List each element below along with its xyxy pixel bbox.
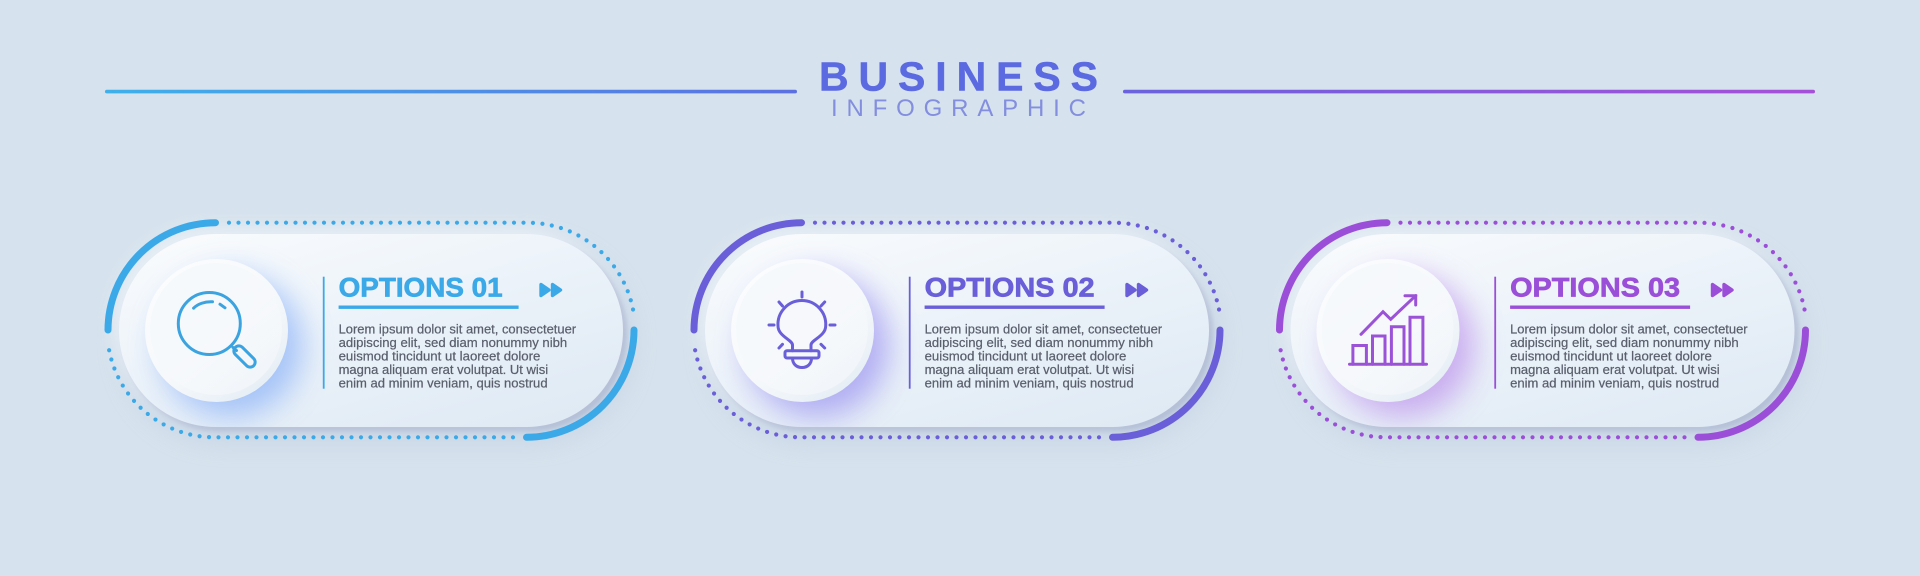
body text bbox=[925, 322, 1162, 390]
solid arc top left bbox=[108, 223, 216, 330]
body text: enim ad minim veniam, quis nostrud bbox=[1510, 376, 1719, 390]
icon: magnifying glass bbox=[178, 292, 257, 369]
pill highlight bbox=[112, 227, 616, 420]
icon circle bbox=[145, 259, 288, 402]
right header line bbox=[1123, 90, 1815, 93]
dotted arc bottom left bbox=[694, 346, 1099, 437]
heading underline bbox=[1510, 306, 1690, 309]
dotted arc top right bbox=[815, 223, 1220, 314]
pill body bbox=[1290, 234, 1794, 427]
panel: options 02 bbox=[694, 223, 1220, 439]
body text: adipiscing elit, sed diam nonummy nibh bbox=[339, 336, 567, 350]
body text: euismod tincidunt ut laoreet dolore bbox=[1510, 350, 1712, 364]
icon: double arrow bbox=[1127, 284, 1146, 296]
pill edge shadow bbox=[708, 238, 1213, 431]
header bbox=[105, 54, 1815, 122]
body text bbox=[1510, 322, 1748, 390]
circle coloured glow bbox=[1330, 273, 1474, 417]
icon circle bbox=[1316, 259, 1460, 402]
pill highlight bbox=[1284, 227, 1788, 420]
pill soft shadow bbox=[1296, 246, 1800, 439]
body text: enim ad minim veniam, quis nostrud bbox=[925, 376, 1134, 390]
pill soft shadow bbox=[125, 246, 629, 439]
body text: euismod tincidunt ut laoreet dolore bbox=[925, 350, 1126, 364]
divider bbox=[1494, 277, 1496, 389]
body text: adipiscing elit, sed diam nonummy nibh bbox=[1510, 336, 1739, 350]
title: BUSINESS: BUSINESS bbox=[819, 54, 1098, 100]
body text: enim ad minim veniam, quis nostrud bbox=[339, 376, 548, 390]
heading underline bbox=[925, 306, 1105, 309]
pill edge shadow bbox=[1294, 238, 1798, 431]
body text: magna aliquam erat volutpat. Ut wisi bbox=[339, 363, 548, 377]
body text: Lorem ipsum dolor sit amet, consectetuer bbox=[1510, 322, 1748, 336]
subtitle: INFOGRAPHIC: INFOGRAPHIC bbox=[831, 95, 1086, 122]
body text: Lorem ipsum dolor sit amet, consectetuer bbox=[925, 322, 1162, 336]
body text: Lorem ipsum dolor sit amet, consectetuer bbox=[339, 322, 576, 336]
icon: growth bar chart bbox=[1350, 296, 1426, 364]
dotted arc bottom left bbox=[108, 346, 513, 437]
pill body bbox=[119, 234, 623, 427]
body text: magna aliquam erat volutpat. Ut wisi bbox=[1510, 363, 1720, 377]
icon: light bulb bbox=[769, 292, 835, 368]
body text: adipiscing elit, sed diam nonummy nibh bbox=[925, 336, 1153, 350]
solid arc top left bbox=[694, 223, 802, 330]
icon circle bbox=[731, 259, 874, 402]
heading underline bbox=[339, 306, 519, 309]
pill soft shadow bbox=[711, 246, 1215, 439]
pill body bbox=[705, 234, 1209, 427]
dotted arc top right bbox=[1400, 223, 1805, 314]
icon: double arrow bbox=[1712, 284, 1732, 296]
dotted arc bottom left bbox=[1280, 346, 1684, 437]
solid arc top left bbox=[1280, 223, 1387, 330]
heading: OPTIONS 02 bbox=[925, 273, 1095, 303]
heading: OPTIONS 01 bbox=[339, 273, 503, 303]
body text: euismod tincidunt ut laoreet dolore bbox=[339, 350, 540, 364]
divider bbox=[323, 277, 325, 389]
circle coloured glow bbox=[159, 273, 303, 417]
dotted arc top right bbox=[229, 223, 634, 314]
circle coloured glow bbox=[745, 273, 889, 417]
body text bbox=[339, 322, 576, 390]
solid arc bottom right bbox=[526, 330, 634, 437]
solid arc bottom right bbox=[1112, 330, 1220, 437]
solid arc bottom right bbox=[1698, 330, 1806, 437]
divider bbox=[909, 277, 911, 389]
heading: OPTIONS 03 bbox=[1510, 273, 1680, 303]
left header line bbox=[105, 90, 797, 93]
pill highlight bbox=[698, 227, 1202, 420]
icon: double arrow bbox=[541, 284, 560, 296]
panel: options 03 bbox=[1280, 223, 1806, 439]
panel: options 01 bbox=[108, 223, 634, 439]
pill edge shadow bbox=[122, 238, 627, 431]
body text: magna aliquam erat volutpat. Ut wisi bbox=[925, 363, 1134, 377]
